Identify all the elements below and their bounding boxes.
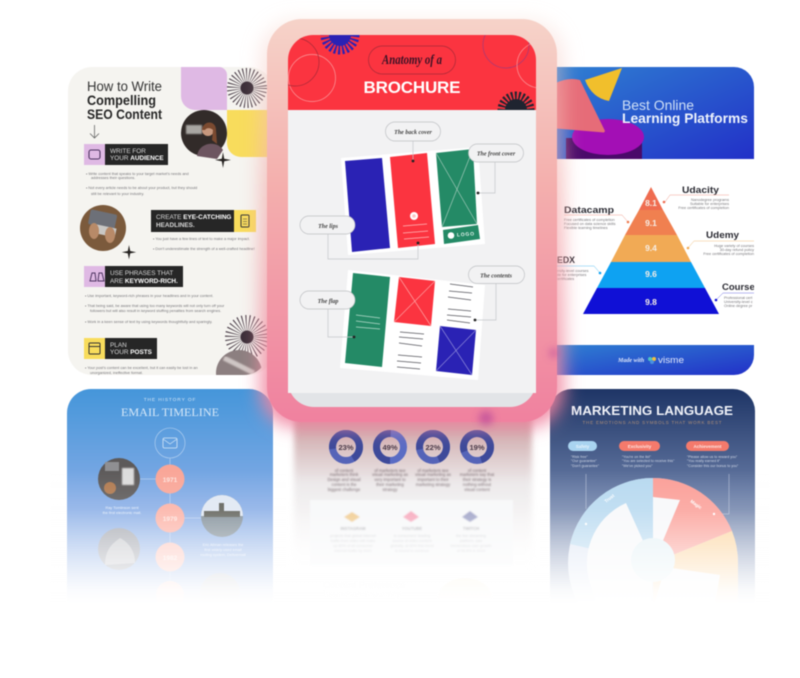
heading: content preference: based on a survey	[323, 589, 401, 600]
text block: keyword bullets: followers but will also result in keyword stuffing penalties from search engines.	[90, 309, 221, 313]
donut: 23%: 23%	[338, 443, 354, 452]
text block: donut captions: Design and visual	[327, 477, 361, 482]
text block: keyword bullets: • Work in a keen sense of text by using keywords thoughtfully and sparingly.	[85, 320, 212, 324]
wheel chart	[568, 477, 738, 586]
text block: donut captions: nothing without	[463, 482, 492, 487]
text block: audience bullets: • Write content that speaks to your target market's needs and	[86, 172, 189, 176]
section: eye-catching headlines: CREATE EYE-CATCHING	[156, 214, 231, 221]
donut: 19%: 19%	[469, 443, 485, 452]
panel: SEO content infographic	[68, 67, 273, 396]
section: write for your audience: WRITE FOR	[110, 148, 146, 155]
label: Udemy: 30-day refund policy	[720, 248, 754, 252]
pyramid chart	[583, 187, 719, 314]
node: faded bottom	[156, 581, 184, 609]
photo: woman at desk	[181, 110, 227, 159]
pill: safety	[568, 441, 600, 468]
text block: posts bullets: • Your post's content can be excellent, but it can easily be lost in an	[85, 366, 198, 370]
panel: email timeline infographic	[67, 389, 273, 619]
text block: audience bullets: addresses their questions.	[91, 176, 135, 180]
shape: pink cone	[556, 79, 605, 132]
text block: 1971 caption: the first electronic mail.	[103, 511, 141, 515]
pill: safety: "Don't guarantee"	[571, 464, 600, 468]
donut: 22%: 22%	[425, 443, 441, 452]
text block: donut captions: biggest challenge	[328, 487, 361, 492]
photo: person	[98, 528, 140, 570]
timeline connector	[133, 458, 201, 600]
text block: donut captions: strategy	[383, 487, 398, 492]
text block: headline bullets: • Don't underestimate the strength of a well-crafted headline!	[153, 247, 255, 251]
photo: semicircle	[215, 350, 262, 376]
pyramid chart: 9.8	[645, 297, 657, 307]
node: 1971: 1971	[163, 477, 178, 484]
label: the contents: The contents	[480, 274, 513, 280]
text block: donut captions: visual marketing as	[372, 472, 408, 477]
pill: achievement	[686, 441, 739, 468]
title: THE HISTORY OF	[144, 397, 196, 403]
text block: platform details: tremendous user growth	[451, 544, 491, 548]
title: Learning Platforms	[622, 110, 748, 126]
lilac block	[181, 67, 227, 110]
section: eye-catching headlines	[151, 210, 256, 232]
yellow block	[227, 110, 268, 157]
text block: platform labels: YOUTUBE	[402, 526, 422, 531]
text block: donut captions: their strategy is	[463, 477, 491, 482]
title	[121, 397, 219, 419]
title: EMAIL TIMELINE	[121, 407, 219, 419]
label: Udacity: Suitable for enterprises	[690, 202, 729, 206]
panel: anatomy of a brochure	[267, 19, 563, 425]
text block: 1979 caption: first widely-used email	[204, 548, 242, 552]
text block: audience bullets: • Not every article needs to be about your product, but they should	[86, 186, 197, 190]
panel: platforms	[310, 500, 513, 565]
text block: platform details	[330, 534, 491, 553]
label: Datacamp: Focused on data science skills	[564, 222, 616, 226]
text block: donut captions: very important to	[374, 477, 406, 482]
text block: donut captions: of content	[335, 468, 354, 473]
label: the front cover: The front cover	[477, 152, 516, 158]
text block: platform details: is bound to continue	[395, 549, 429, 553]
text block: keyword bullets: • Use important, keyword-rich phrases in your headlines and in your content.	[85, 294, 213, 298]
title: Compelling	[87, 93, 156, 108]
label: Udacity: Udacity	[682, 185, 720, 196]
text block: platform details: traffic from video will make	[331, 539, 375, 543]
text block: platform labels	[340, 526, 479, 531]
pill: achievement: "You really earned it"	[687, 459, 721, 463]
donut: 49%: 49%	[382, 443, 398, 452]
label: Udacity: Nanodegree programs	[691, 198, 729, 202]
label: the flap: The flap	[318, 299, 338, 305]
icon: sparkle	[215, 152, 231, 168]
text block: headline bullets	[153, 237, 255, 251]
label: Datacamp: Datacamp	[564, 205, 614, 216]
label: Coursera	[714, 282, 755, 308]
text block: donut captions: visual marketing as	[415, 472, 451, 477]
title: SEO Content	[87, 107, 162, 122]
panel: marketing language infographic	[549, 388, 756, 588]
text block: 1979 caption: Eric Allman releases the	[203, 543, 243, 547]
label: the back cover: The back cover	[394, 130, 432, 136]
text block: platform details: of 56.8% in 2019	[457, 549, 485, 553]
chart: faded semicircle	[438, 578, 492, 598]
heading: brochure: BROCHURE	[364, 78, 460, 97]
label: Datacamp: Free certificates of completion	[564, 218, 615, 222]
logo tag: LOGO	[457, 231, 475, 238]
text block: audience bullets: still be relevant to your industry.	[91, 192, 144, 196]
pill: achievement: "Consider this our bonus to you"	[687, 464, 739, 468]
photo: faded	[200, 573, 240, 613]
label: the front cover	[468, 144, 524, 162]
text block: donut captions: marketers think	[330, 472, 359, 477]
icon: youtube	[403, 511, 419, 522]
text block: platform details: projects that global Internet	[330, 534, 377, 538]
wheel petals	[588, 496, 720, 588]
title: MARKETING LANGUAGE	[571, 403, 733, 418]
icon: blue burst	[325, 20, 355, 50]
node: 1971	[156, 464, 184, 494]
label: Udemy: Free certificates of completion	[703, 252, 754, 256]
fade overlay	[50, 470, 770, 628]
label: the back cover	[386, 122, 440, 141]
text block: 1971 caption	[103, 506, 141, 515]
text block: keyword bullets: • That being said, be aware that using too many keywords will not only turn off your	[85, 304, 225, 308]
panel: online learning platforms infographic	[556, 67, 764, 375]
arrow	[90, 125, 99, 138]
text block: donut captions: of marketers see	[417, 468, 449, 473]
heading: content preference	[323, 580, 405, 600]
pill: exclusivity: "You're on the list"	[622, 455, 652, 459]
title: How to Write	[87, 79, 162, 94]
text block: platform details: the live streaming	[456, 534, 486, 538]
pill heading: anatomy of a	[368, 46, 456, 74]
text block: 1979 caption: routing system, Delivermail	[200, 553, 246, 557]
node: 1982: 1982	[163, 555, 178, 562]
label: Datacamp	[564, 205, 629, 230]
text block: donut captions: important to their	[417, 477, 449, 482]
pill: exclusivity: Exclusivity	[628, 444, 652, 449]
footer: made with visme: Made with	[617, 358, 645, 364]
shape: purple cylinder	[566, 118, 645, 160]
pyramid chart: 8.1	[645, 198, 657, 208]
photo: hands on laptop	[80, 205, 126, 251]
label: Coursera: Coursera	[722, 282, 764, 293]
text block: donut captions	[327, 468, 495, 492]
text block: platform labels: INSTAGRAM	[340, 526, 366, 531]
label: Udacity: Free certificates of completion	[678, 206, 729, 210]
pyramid chart: 9.1	[645, 218, 657, 228]
donut: 49%	[376, 434, 404, 460]
text block: 1971 caption: Ray Tomlinson sent	[105, 506, 139, 510]
pill: safety: Safety	[576, 444, 590, 449]
section: keyword-rich phrases	[84, 266, 183, 287]
text block: headline bullets: • You just have a few lines of text to make a major impact.	[153, 237, 250, 241]
text block: donut captions: content is the	[332, 482, 357, 487]
label: Coursera: University-level c	[724, 300, 753, 304]
text block: platform labels: TWITCH	[463, 526, 479, 531]
pill: achievement: "Please allow us to reward you"	[687, 455, 738, 459]
label: EDX	[556, 255, 601, 281]
footer: made with visme: visme	[658, 355, 684, 366]
text block: audience bullets	[86, 172, 197, 196]
pill: safety: "Our guarantee"	[571, 459, 597, 463]
glow behind brochure card	[260, 19, 564, 427]
label: Udemy: Huge variety of courses	[714, 244, 754, 248]
pill heading: anatomy of a: Anatomy of a	[381, 52, 442, 67]
text block: keyword bullets	[85, 294, 225, 324]
title: Best Online	[622, 97, 694, 113]
text block: platform details: up 80% of all consumer	[333, 544, 374, 548]
icon: starburst bottom	[236, 326, 258, 348]
pyramid chart: 9.6	[645, 269, 657, 279]
text block: platform details: source of video content	[392, 539, 433, 543]
section: write for your audience: YOUR AUDIENCE	[110, 155, 164, 162]
panel: visual content statistics infographic	[294, 416, 532, 600]
text block: donut captions: their marketing	[376, 482, 405, 487]
text block: 1979 caption	[200, 543, 246, 557]
pill: exclusivity: "You are selected to receive this"	[622, 459, 675, 463]
node: 1982	[156, 542, 184, 572]
text block: posts bullets	[85, 366, 198, 375]
text block: platform details: platform, saw	[460, 539, 483, 543]
label: Coursera: Professional cert	[724, 296, 753, 300]
label: EDX: ersity-level courses	[556, 269, 589, 273]
node: 1979: 1979	[163, 516, 178, 523]
text block: platform details: is consumers' leading	[394, 534, 430, 538]
label: EDX: certificates	[556, 277, 574, 281]
text block: platform details: Internet traffic by 2021	[334, 549, 372, 553]
wheel chart: Trust	[604, 493, 616, 504]
title	[622, 97, 748, 126]
pill: exclusivity: "We've picked you"	[622, 464, 653, 468]
text block: donut captions: visual content	[464, 487, 491, 492]
wheel chart: Magic	[689, 499, 703, 510]
label: the flap	[300, 291, 355, 309]
logo tag	[443, 225, 480, 244]
connector lines	[328, 141, 496, 337]
icon: twitch	[462, 511, 478, 522]
pill: exclusivity	[619, 441, 675, 468]
header banner	[556, 67, 754, 167]
donut: 19%	[460, 430, 494, 464]
label: the lips	[300, 216, 355, 234]
donut: 23%	[331, 432, 361, 462]
connector dots	[353, 160, 479, 338]
label: EDX: EDX	[557, 255, 576, 266]
text block: donut captions: of content	[468, 468, 487, 473]
diagram: brochure inside	[340, 270, 485, 380]
text block: donut captions: of marketers see	[374, 468, 406, 473]
text block: platform details: globally, at 60% this trend	[390, 544, 434, 548]
connector lines	[586, 474, 729, 514]
text block: donut captions: marketing strategy	[416, 482, 451, 487]
section: plan your posts: YOUR POSTS	[110, 349, 153, 356]
section: eye-catching headlines: HEADLINES.	[156, 222, 195, 229]
label: Udacity	[663, 185, 729, 210]
node: 1979	[156, 504, 184, 532]
title	[87, 79, 162, 122]
section: keyword-rich phrases: USE PHRASES THAT	[110, 270, 173, 277]
section: write for your audience	[84, 144, 168, 165]
pill: achievement: Achievement	[693, 444, 722, 449]
pill: safety: "Risk free"	[571, 455, 588, 459]
label: the contents	[468, 266, 524, 284]
label: EDX: ble for enterprises	[556, 273, 586, 277]
section: plan your posts	[84, 338, 157, 359]
photo: city view	[201, 495, 243, 537]
donut: 22%	[417, 431, 449, 463]
footer: made with visme	[556, 345, 754, 375]
text block: donut captions: marketers say that	[460, 472, 495, 477]
subtitle: THE EMOTIONS AND SYMBOLS THAT WORK BEST	[582, 420, 722, 425]
heading: content preference: Content Preference	[323, 580, 405, 591]
icon: envelope	[155, 428, 185, 458]
section: plan your posts: PLAN	[110, 342, 127, 349]
icon: starburst top	[237, 78, 257, 98]
icon: instagram	[344, 512, 360, 522]
pyramid chart: 9.4	[645, 243, 657, 253]
label: Udemy: Udemy	[706, 230, 740, 241]
header	[287, 34, 537, 111]
label: Udemy	[687, 230, 754, 256]
text block: posts bullets: unorganized, ineffective format.	[90, 371, 143, 375]
photo: office desk	[98, 458, 140, 500]
diagram: brochure back side	[341, 147, 485, 255]
label: Coursera: Online degree pr	[724, 304, 753, 308]
section: keyword-rich phrases: ARE KEYWORD-RICH.	[110, 278, 178, 285]
shape: yellow cone	[585, 68, 622, 101]
icon: dark burst	[502, 96, 530, 124]
label: Datacamp: Flexible learning timelines	[564, 226, 608, 230]
icon: sparkle	[122, 245, 136, 259]
label: the lips: The lips	[318, 224, 339, 230]
